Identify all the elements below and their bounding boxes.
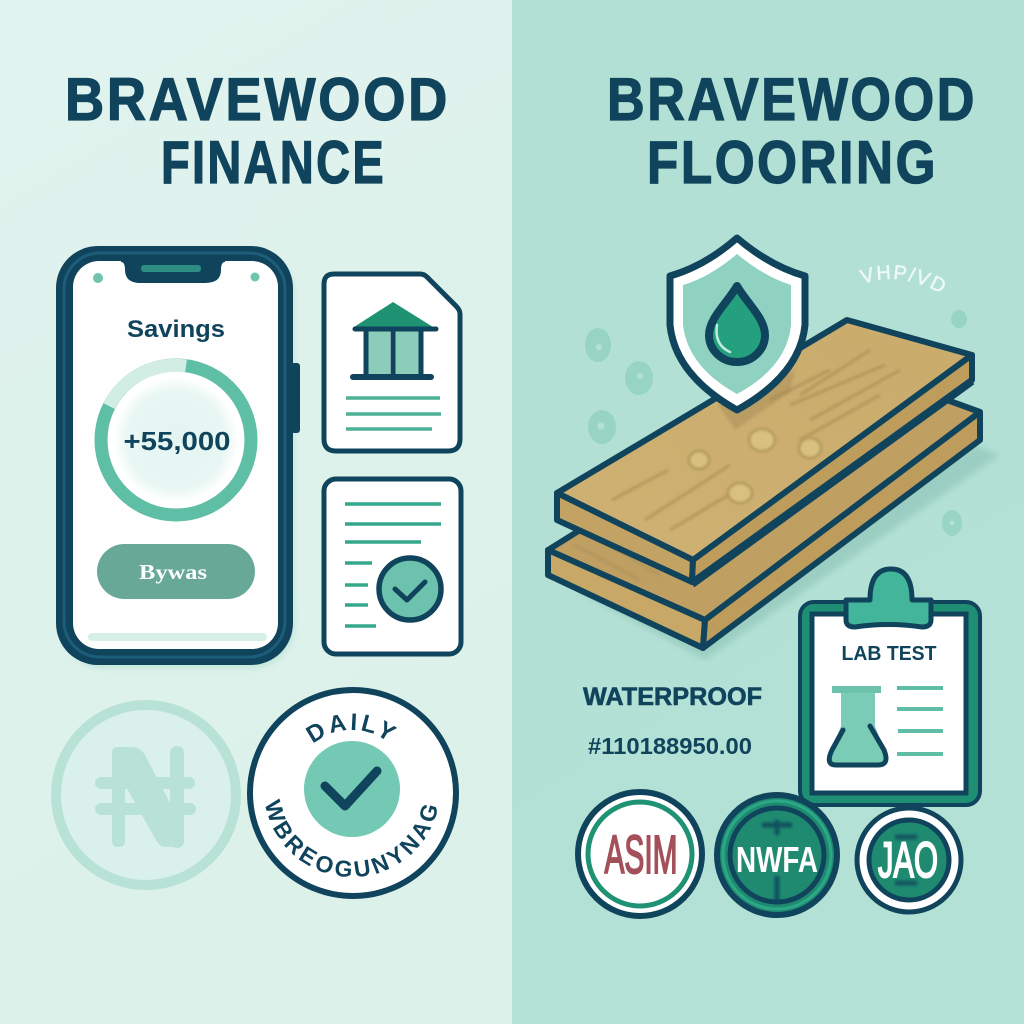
water droplets bbox=[689, 429, 821, 503]
title: Bravewood Finance: BRAVEWOOD bbox=[65, 66, 450, 133]
lower plank bbox=[548, 400, 980, 648]
badge: NWFA: NWFA bbox=[736, 839, 818, 880]
badge: NWFA bbox=[717, 795, 837, 915]
panel: flooring background bbox=[512, 0, 1024, 1024]
icon: flask bbox=[829, 686, 886, 765]
text: amount: +55,000 bbox=[124, 426, 230, 456]
title: Bravewood Finance bbox=[65, 66, 450, 196]
badge: JAO: JAO bbox=[878, 832, 938, 888]
badge centre check bbox=[304, 741, 400, 837]
clipboard: lab test bbox=[800, 569, 980, 805]
flooring planks bbox=[548, 320, 1000, 660]
title: Bravewood Flooring: BRAVEWOOD bbox=[607, 66, 977, 133]
phone: savings app bbox=[56, 246, 300, 668]
shield shadow on plank bbox=[718, 370, 795, 430]
clipboard clip bbox=[846, 569, 931, 627]
text: badge arc: WBREOGUNYNAG bbox=[266, 798, 437, 877]
badge: daily bbox=[247, 687, 459, 899]
text: daily: DAILY bbox=[306, 714, 398, 743]
panel: finance background bbox=[0, 0, 512, 1024]
icon: check circle bbox=[379, 558, 441, 620]
wood grain bbox=[612, 350, 900, 530]
icon: naira coin bbox=[56, 705, 236, 885]
water drop bbox=[709, 286, 765, 362]
text: lab test: LAB TEST bbox=[842, 643, 936, 665]
badge: JAO bbox=[857, 808, 961, 912]
button: Bywas bbox=[139, 560, 207, 584]
text: vhp/vd arc: VHP/VD bbox=[858, 264, 945, 292]
icon: waterproof shield bbox=[670, 238, 805, 410]
title: Bravewood Flooring bbox=[607, 66, 977, 196]
savings ring bbox=[101, 365, 251, 515]
text: reference number: #110188950.00 bbox=[588, 733, 752, 759]
text: waterproof: WATERPROOF bbox=[583, 683, 762, 711]
text: savings: Savings bbox=[127, 316, 225, 343]
button bbox=[97, 544, 255, 599]
decorative water bubbles bbox=[585, 310, 967, 536]
icon: bank building bbox=[353, 302, 436, 377]
title: Bravewood Finance: FINANCE bbox=[161, 129, 386, 196]
badge: ASIM: ASIM bbox=[604, 825, 678, 885]
document: approved checklist bbox=[324, 479, 461, 654]
badge: ASIM bbox=[578, 792, 702, 916]
upper plank bbox=[557, 320, 972, 584]
title: Bravewood Flooring: FLOORING bbox=[647, 129, 938, 196]
phone notch bbox=[121, 258, 225, 283]
document: bank bbox=[324, 274, 460, 451]
